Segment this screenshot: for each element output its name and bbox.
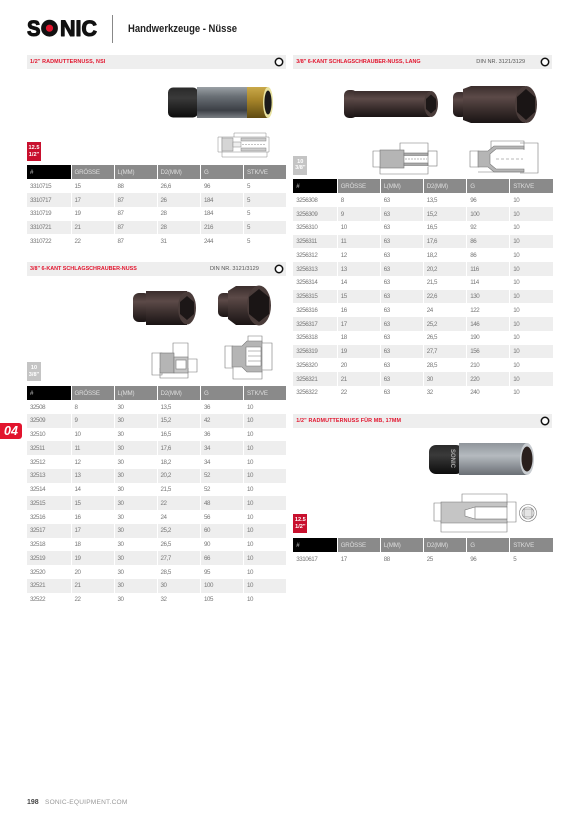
- section heading: 3/8" 6-Kant Schlagschrauber-Nuss, lang: DIN NR. 3121/3129: [476, 59, 525, 65]
- table: short sockets: 30: [118, 582, 124, 589]
- table: MB socket: 5: [513, 556, 516, 563]
- table: long sockets: 63: [384, 252, 390, 259]
- table: long sockets: 92: [470, 224, 476, 231]
- table: short sockets: 10: [247, 555, 253, 562]
- table: short sockets: 32514: [30, 486, 45, 493]
- table: long sockets: 3256311: [296, 238, 317, 245]
- table: NSI sockets: 184: [204, 210, 213, 217]
- table: short sockets: 10: [247, 527, 253, 534]
- table: short sockets: 32509: [30, 417, 45, 424]
- table: long sockets: 10: [513, 348, 519, 355]
- table: MB socket: D2(MM): [427, 542, 448, 549]
- table: long sockets: 10: [513, 197, 519, 204]
- table: long sockets: 10: [513, 320, 519, 328]
- table: NSI sockets: 244: [204, 238, 213, 245]
- table: long sockets: 18: [341, 334, 347, 341]
- table: short sockets: 10: [247, 500, 253, 507]
- table: long sockets: #: [296, 183, 299, 190]
- size badge: 10 3/8: 3/8": [29, 372, 39, 378]
- table: short sockets: G: [204, 390, 209, 397]
- table: long sockets: 86: [470, 238, 476, 245]
- table: long sockets: 22,6: [427, 293, 437, 300]
- section heading: 3/8" 6-Kant Schlagschrauber-Nuss: DIN NR. 3121/3129: [210, 266, 259, 272]
- table: short sockets: 34: [204, 445, 210, 452]
- section heading: 1/2" Radmutternuss für MB, 17mm: 1/2" RADMUTTERNUSS FÜR MB, 17MM: [296, 418, 401, 424]
- size badge: 10 3/8: 10: [297, 158, 303, 164]
- table: short sockets: 12: [74, 459, 81, 466]
- table: long sockets: 3256315: [296, 293, 317, 300]
- table: short sockets: D2(MM): [160, 390, 182, 397]
- table: long sockets: 3256309: [296, 210, 317, 218]
- section heading: 3/8" 6-Kant Schlagschrauber-Nuss: [27, 262, 286, 276]
- technical drawing: MB socket: [434, 494, 537, 532]
- table: long sockets: [293, 179, 553, 396]
- table: NSI sockets: 87: [118, 197, 124, 204]
- table: long sockets: 156: [470, 348, 479, 355]
- chapter tab: 04: 04: [4, 424, 18, 438]
- table: NSI sockets: GRÖSSE: [74, 169, 100, 176]
- table: long sockets: 3256308: [296, 197, 317, 204]
- table: long sockets: 28,5: [427, 362, 437, 369]
- table: long sockets: 63: [384, 293, 390, 300]
- table: short sockets: 30: [118, 555, 124, 562]
- table: long sockets: 3256318: [296, 334, 317, 341]
- table: short sockets: 19: [74, 555, 81, 562]
- table: short sockets: 32520: [30, 569, 45, 576]
- table: NSI sockets: 216: [204, 224, 213, 231]
- table: long sockets: 240: [470, 389, 479, 396]
- table: short sockets: 32516: [30, 514, 45, 521]
- table: long sockets: 16,5: [427, 224, 437, 231]
- table: long sockets: 63: [384, 238, 390, 245]
- table: long sockets: 63: [384, 389, 390, 396]
- table: MB socket: 88: [384, 556, 390, 563]
- table: short sockets: 22: [160, 500, 167, 507]
- table: short sockets: 17,6: [160, 445, 171, 452]
- table: short sockets: 30: [118, 500, 124, 507]
- table: long sockets: 13: [341, 266, 347, 272]
- table: long sockets: D2(MM): [427, 183, 448, 190]
- table: long sockets: 130: [470, 293, 479, 300]
- table: long sockets: 63: [384, 266, 390, 272]
- table: short sockets: 9: [74, 417, 78, 424]
- header divider: [112, 15, 113, 43]
- section heading: 1/2" Radmutternuss, NSI: 1/2" RADMUTTERNUSS, NSI: [30, 59, 105, 65]
- table: long sockets: 21: [341, 376, 347, 382]
- table: short sockets: 18: [74, 541, 81, 548]
- table: short sockets: 25,2: [160, 527, 171, 534]
- table: long sockets: STK/VE: [513, 183, 534, 190]
- table: long sockets: 32: [427, 389, 433, 396]
- table: NSI sockets: 184: [204, 197, 213, 204]
- table: short sockets: 10: [247, 541, 253, 548]
- table: NSI sockets: 5: [247, 238, 250, 245]
- table: NSI sockets: 5: [247, 197, 250, 204]
- table: short sockets: 30: [118, 445, 124, 452]
- table: short sockets: 32510: [30, 431, 45, 438]
- table: long sockets: 10: [513, 279, 519, 286]
- table: long sockets: 3256313: [296, 266, 317, 272]
- table: short sockets: 20: [74, 569, 81, 576]
- table: long sockets: 3256312: [296, 252, 317, 259]
- table: NSI sockets: 3310722: [30, 238, 51, 245]
- table: short sockets: GRÖSSE: [74, 390, 100, 397]
- table: NSI sockets: 31: [160, 238, 167, 245]
- table: short sockets: 10: [247, 459, 253, 466]
- table: long sockets: 3256317: [296, 320, 317, 328]
- table: short sockets: 17: [74, 527, 81, 534]
- table: long sockets: 190: [470, 334, 479, 341]
- table: NSI sockets: 19: [74, 210, 81, 217]
- table: NSI sockets: 87: [118, 210, 124, 217]
- table: MB socket: 3310617: [296, 556, 317, 563]
- table: long sockets: 63: [384, 362, 390, 369]
- table: NSI sockets: 3310715: [30, 183, 51, 190]
- table: short sockets: 10: [247, 514, 253, 521]
- table: NSI sockets: 3310719: [30, 210, 51, 217]
- section heading: 3/8" 6-Kant Schlagschrauber-Nuss, lang: [293, 55, 552, 69]
- table: short sockets: 16,5: [160, 431, 171, 438]
- size badge: 12.5 1/2: 12.5: [295, 517, 306, 523]
- table: long sockets: 63: [384, 210, 390, 218]
- table: long sockets: 10: [513, 252, 519, 259]
- table: short sockets: 30: [118, 472, 124, 479]
- table: short sockets: 22: [74, 596, 81, 603]
- size badge: 12.5 1/2: [293, 514, 307, 533]
- technical drawing: short wide socket: [224, 336, 272, 380]
- table: long sockets: 63: [384, 279, 390, 286]
- table: long sockets: 3256319: [296, 348, 317, 355]
- technical drawing: long slim socket: [372, 142, 438, 174]
- table: NSI sockets: 96: [204, 183, 210, 190]
- table: long sockets: 122: [470, 307, 479, 314]
- section heading: 3/8" 6-Kant Schlagschrauber-Nuss: 3/8" 6-KANT SCHLAGSCHRAUBER-NUSS: [30, 266, 137, 272]
- table: long sockets: 114: [470, 279, 479, 286]
- table: short sockets: 32522: [30, 596, 45, 603]
- table: NSI sockets: [27, 165, 286, 245]
- table: short sockets: 32512: [30, 459, 45, 466]
- table: NSI sockets: 22: [74, 238, 81, 245]
- table: long sockets: 63: [384, 320, 390, 328]
- table: short sockets: 95: [204, 569, 210, 576]
- table: long sockets: 26,5: [427, 334, 437, 341]
- table: short sockets: STK/VE: [247, 390, 268, 397]
- table: short sockets: 10: [247, 472, 253, 479]
- table: short sockets: 36: [204, 431, 210, 438]
- table: short sockets: 10: [247, 431, 253, 438]
- table: short sockets: #: [30, 390, 33, 397]
- table: short sockets: 90: [204, 541, 210, 548]
- product photo: long socket, slim: [344, 90, 438, 118]
- table: short sockets: 32517: [30, 527, 45, 534]
- table: long sockets: 63: [384, 197, 390, 204]
- table: short sockets: 60: [204, 527, 210, 534]
- table: NSI sockets: 3310721: [30, 224, 51, 231]
- table: long sockets: 11: [341, 238, 346, 245]
- table: short sockets: 27,7: [160, 555, 171, 562]
- chapter tab: 04: [0, 423, 22, 439]
- table: long sockets: 14: [341, 279, 347, 286]
- table: long sockets: 30: [427, 376, 433, 382]
- table: short sockets: 10: [247, 445, 253, 452]
- table: long sockets: L(MM): [384, 183, 401, 190]
- table: short sockets: [27, 386, 286, 603]
- table: MB socket: GRÖSSE: [341, 542, 366, 549]
- table: short sockets: 42: [204, 417, 210, 424]
- table: NSI sockets: 5: [247, 224, 250, 231]
- size badge: 10 3/8: [27, 362, 41, 381]
- table: short sockets: 32511: [30, 445, 45, 452]
- table: short sockets: 30: [118, 486, 124, 493]
- table: NSI sockets: 88: [118, 183, 124, 190]
- table: long sockets: 22: [341, 389, 347, 396]
- website: SONIC-EQUIPMENT.COM: [45, 799, 128, 806]
- table: long sockets: 27,7: [427, 348, 437, 355]
- table: long sockets: G: [470, 183, 475, 190]
- table: NSI sockets: 87: [118, 238, 124, 245]
- table: long sockets: 10: [513, 307, 519, 314]
- product photo: MB wheel nut socket: SONIC: [449, 449, 455, 469]
- table: long sockets: 100: [470, 210, 479, 218]
- table: long sockets: 146: [470, 320, 479, 328]
- table: short sockets: 32515: [30, 500, 45, 507]
- table: short sockets: 30: [118, 527, 124, 534]
- table: long sockets: 24: [427, 307, 433, 314]
- table: short sockets: 30: [160, 582, 167, 589]
- table: short sockets: 10: [74, 431, 81, 438]
- table: long sockets: 10: [513, 376, 519, 382]
- table: short sockets: 10: [247, 417, 253, 424]
- table: long sockets: 10: [513, 238, 519, 245]
- table: long sockets: 17,6: [427, 238, 437, 245]
- table: short sockets: 32513: [30, 472, 45, 479]
- table: long sockets: 10: [513, 293, 519, 300]
- table: long sockets: 10: [513, 266, 519, 272]
- table: short sockets: 48: [204, 500, 210, 507]
- table: long sockets: GRÖSSE: [341, 183, 366, 190]
- table: short sockets: 24: [160, 514, 167, 521]
- table: short sockets: 13,5: [160, 404, 171, 411]
- table: short sockets: 26,5: [160, 541, 171, 548]
- table: MB socket: STK/VE: [513, 542, 534, 549]
- size badge: 10 3/8: 3/8": [295, 165, 306, 171]
- table: short sockets: 13: [74, 472, 81, 479]
- table: long sockets: 86: [470, 252, 476, 259]
- table: MB socket: L(MM): [384, 542, 401, 549]
- table: MB socket: [293, 538, 553, 563]
- table: long sockets: 19: [341, 348, 347, 355]
- table: short sockets: 32521: [30, 582, 45, 589]
- table: short sockets: 18,2: [160, 459, 171, 466]
- table: short sockets: 10: [247, 404, 253, 411]
- size badge: 10 3/8: 10: [31, 365, 37, 371]
- table: short sockets: 16: [74, 514, 81, 521]
- table: short sockets: 30: [118, 404, 124, 411]
- table: long sockets: 3256314: [296, 279, 317, 286]
- product photo: short socket, slim: [133, 291, 196, 325]
- table: short sockets: 105: [204, 596, 213, 603]
- table: short sockets: 30: [118, 569, 124, 576]
- table: short sockets: 11: [74, 445, 80, 452]
- table: NSI sockets: STK/VE: [247, 169, 268, 176]
- technical drawing: short slim socket: [152, 342, 198, 378]
- size badge: 12.5 1/2: 1/2": [29, 152, 39, 158]
- table: short sockets: 28,5: [160, 569, 171, 576]
- table: NSI sockets: 26,6: [160, 183, 171, 190]
- table: long sockets: 3256316: [296, 307, 317, 314]
- product photo: MB wheel nut socket: [429, 443, 534, 475]
- table: long sockets: 10: [513, 334, 519, 341]
- table: long sockets: 63: [384, 348, 390, 355]
- table: long sockets: 63: [384, 307, 390, 314]
- table: short sockets: 32519: [30, 555, 45, 562]
- table: MB socket: G: [470, 542, 475, 549]
- table: short sockets: 30: [118, 541, 124, 548]
- technical drawing: NSI socket: [218, 132, 270, 158]
- table: short sockets: 34: [204, 459, 210, 466]
- table: NSI sockets: 87: [118, 224, 124, 231]
- table: short sockets: 21,5: [160, 486, 171, 493]
- table: short sockets: 32518: [30, 541, 45, 548]
- table: short sockets: 10: [247, 582, 253, 589]
- table: long sockets: 3256310: [296, 224, 317, 231]
- table: short sockets: 10: [247, 569, 253, 576]
- table: NSI sockets: L(MM): [118, 169, 134, 176]
- table: long sockets: 63: [384, 376, 390, 382]
- table: short sockets: 52: [204, 472, 210, 479]
- table: NSI sockets: 21: [74, 224, 81, 231]
- table: short sockets: L(MM): [118, 390, 134, 397]
- table: short sockets: 36: [204, 404, 210, 411]
- table: long sockets: 8: [341, 197, 344, 204]
- table: NSI sockets: 5: [247, 210, 250, 217]
- section heading: 1/2" Radmutternuss für MB, 17mm: [293, 414, 552, 428]
- technical drawing: long wide socket: [470, 140, 538, 174]
- product photo: long socket, wide: [453, 86, 537, 123]
- table: short sockets: 30: [118, 417, 124, 424]
- table: long sockets: 10: [513, 389, 519, 396]
- section heading: 1/2" Radmutternuss, NSI: [27, 55, 286, 69]
- table: long sockets: 20: [341, 362, 347, 369]
- table: short sockets: 30: [118, 514, 124, 521]
- table: long sockets: 116: [470, 266, 479, 272]
- table: long sockets: 15,2: [427, 210, 437, 218]
- table: NSI sockets: G: [204, 169, 209, 176]
- table: MB socket: #: [296, 542, 299, 549]
- table: NSI sockets: #: [30, 169, 33, 176]
- table: long sockets: 21,5: [427, 279, 437, 286]
- table: short sockets: 30: [118, 431, 124, 438]
- product photo: short socket, wide: [218, 286, 271, 326]
- table: NSI sockets: 17: [74, 197, 81, 204]
- table: long sockets: 3256322: [296, 389, 317, 396]
- table: long sockets: 16: [341, 307, 347, 314]
- table: short sockets: 52: [204, 486, 210, 493]
- table: MB socket: 17: [341, 556, 347, 563]
- table: long sockets: 20,2: [427, 266, 437, 272]
- table: long sockets: 9: [341, 210, 344, 218]
- size badge: 12.5 1/2: [27, 142, 41, 161]
- table: long sockets: 10: [341, 224, 347, 231]
- table: long sockets: 10: [513, 362, 519, 369]
- table: short sockets: 14: [74, 486, 81, 493]
- table: long sockets: 63: [384, 224, 390, 231]
- table: long sockets: 15: [341, 293, 347, 300]
- table: long sockets: 12: [341, 252, 347, 259]
- table: short sockets: 8: [74, 404, 78, 411]
- table: short sockets: 15,2: [160, 417, 171, 424]
- table: long sockets: 25,2: [427, 320, 437, 328]
- table: long sockets: 17: [341, 320, 347, 328]
- table: short sockets: 66: [204, 555, 210, 562]
- table: short sockets: 100: [204, 582, 213, 589]
- size badge: 10 3/8: [293, 156, 307, 174]
- table: long sockets: 18,2: [427, 252, 437, 259]
- table: NSI sockets: 15: [74, 183, 81, 190]
- table: short sockets: 10: [247, 596, 253, 603]
- table: long sockets: 10: [513, 210, 519, 218]
- section heading: 3/8" 6-Kant Schlagschrauber-Nuss, lang: 3/8" 6-KANT SCHLAGSCHRAUBER-NUSS, LANG: [296, 59, 421, 65]
- table: short sockets: 30: [118, 596, 124, 603]
- table: NSI sockets: 5: [247, 183, 250, 190]
- table: NSI sockets: 3310717: [30, 197, 51, 204]
- table: MB socket: 25: [427, 556, 433, 563]
- table: short sockets: 10: [247, 486, 253, 493]
- table: NSI sockets: 26: [160, 197, 167, 204]
- table: MB socket: 96: [470, 556, 476, 563]
- table: long sockets: 96: [470, 197, 476, 204]
- table: NSI sockets: D2(MM): [160, 169, 182, 176]
- page number: 198: [27, 799, 39, 806]
- table: long sockets: 210: [470, 362, 479, 369]
- table: short sockets: 20,2: [160, 472, 171, 479]
- table: short sockets: 15: [74, 500, 81, 507]
- table: short sockets: 32: [160, 596, 167, 603]
- table: short sockets: 32508: [30, 404, 45, 411]
- table: long sockets: 3256321: [296, 376, 317, 382]
- table: long sockets: 13,5: [427, 197, 437, 204]
- size badge: 12.5 1/2: 12.5: [29, 145, 39, 151]
- product photo: NSI wheel nut socket: [168, 87, 273, 118]
- table: long sockets: 10: [513, 224, 519, 231]
- table: long sockets: 3256320: [296, 362, 317, 369]
- table: short sockets: 21: [74, 582, 81, 589]
- table: NSI sockets: 28: [160, 224, 167, 231]
- size badge: 12.5 1/2: 1/2": [295, 524, 306, 530]
- brand logo: Sonic: [27, 16, 97, 40]
- table: short sockets: 56: [204, 514, 210, 521]
- table: NSI sockets: 28: [160, 210, 167, 217]
- table: short sockets: 30: [118, 459, 124, 466]
- table: long sockets: 220: [470, 376, 479, 382]
- table: long sockets: 63: [384, 334, 390, 341]
